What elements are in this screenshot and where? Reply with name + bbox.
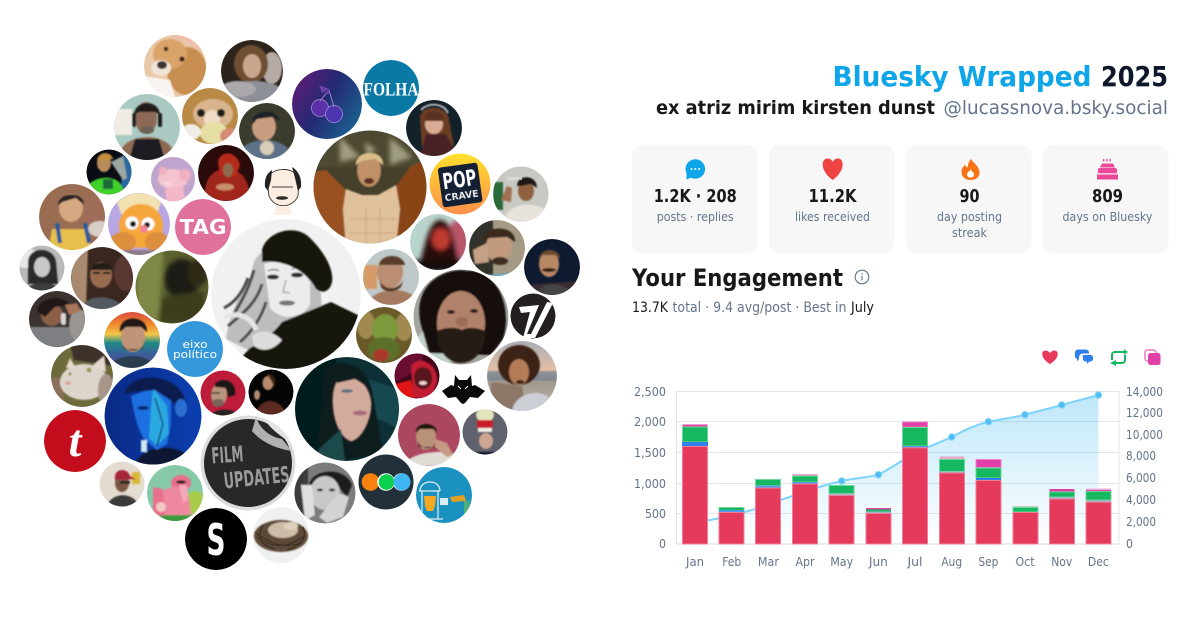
month labels: Sep (978, 555, 998, 569)
avatar: orange cartoon character (108, 193, 170, 258)
avatar: girl with brown hair (221, 40, 283, 102)
bar: Nov (1050, 489, 1074, 544)
line data points (838, 392, 1102, 484)
avatar: TAG logo: TAG (180, 215, 226, 239)
avatar: red robed man painting (198, 145, 254, 201)
avatar: black and white woman (20, 246, 64, 290)
bar: May (829, 486, 854, 544)
stacked bars (682, 422, 1111, 544)
stat value: 1.2K · 208 (654, 186, 737, 207)
avatar: man on rose background (398, 404, 460, 466)
avatar: bird nest (253, 507, 309, 563)
avatar: meerkat plush (181, 88, 240, 144)
avatar: tumblr-style t logo: t (69, 415, 83, 466)
month labels: Nov (1051, 555, 1072, 569)
subtitle: display name and handle (656, 97, 1168, 119)
avatar: Film Updates sticker logo: FILM (211, 442, 244, 470)
avatar: Pop Crave logo (430, 154, 490, 214)
avatar: white cat (51, 345, 114, 407)
right axis labels: 8,000 (1126, 449, 1156, 463)
stat label: posts · replies (657, 209, 734, 224)
panel: stat days on Bluesky (1043, 145, 1168, 253)
avatar: man in red cap (100, 462, 144, 508)
avatar: blurry red face (410, 214, 470, 272)
avatar: man in blue light (104, 368, 202, 468)
bar: Jul (902, 422, 928, 544)
avatar: man in red light (394, 354, 440, 398)
cumulative area (695, 395, 1098, 544)
bar: Feb (719, 508, 744, 544)
avatar: FOLHA logo: FOLHA (364, 80, 419, 100)
icon: repost arrows (1110, 349, 1128, 366)
left axis labels: 1,500 (634, 446, 666, 460)
avatar: man on phone (29, 291, 89, 347)
month labels: Jun (868, 555, 888, 569)
cumulative line (695, 395, 1098, 523)
avatar: large black and white portrait with hat (211, 219, 364, 374)
month labels: May (830, 555, 853, 569)
month labels: Apr (796, 555, 815, 569)
bar: Aug (940, 456, 964, 544)
avatar: big curly haired man (414, 270, 508, 367)
heading: Your Engagement: Your Engagement (631, 264, 843, 292)
panel: stat posts and replies (632, 145, 758, 253)
avatar: man with headphones (114, 94, 180, 160)
left axis labels: 2,000 (634, 415, 666, 429)
right axis labels (1126, 385, 1163, 551)
avatar: man in green suit (86, 150, 132, 196)
avatar: tumblr-style t logo (44, 410, 106, 472)
bar: Mar (756, 480, 780, 544)
avatar: pink tongue pokemon (147, 465, 205, 523)
icon: speech bubble (686, 159, 705, 180)
avatar: sketch of bald man (264, 167, 302, 215)
icon: info (855, 270, 869, 284)
left axis labels (634, 385, 666, 551)
month labels: Jul (906, 555, 922, 569)
icon: replies chat bubbles (1075, 350, 1093, 364)
bar: Sep (976, 460, 1001, 544)
stat value: 90 (960, 186, 980, 207)
avatar: woman with long dark hair in teal light (295, 357, 399, 461)
month labels: Feb (722, 555, 741, 569)
chart: monthly engagement stacked bars with cumulative line (634, 385, 1163, 569)
avatar: S logo (185, 508, 247, 570)
avatar: man on rainbow background (104, 312, 160, 368)
right axis labels: 14,000 (1126, 385, 1163, 399)
avatar: man with raised hand: cremla (507, 176, 523, 182)
month labels: Dec (1088, 555, 1109, 569)
avatar: S logo: S (206, 515, 226, 566)
left axis labels: 0 (659, 537, 666, 551)
right axis labels: 6,000 (1126, 471, 1156, 485)
avatar: golden dog (144, 35, 207, 97)
stat value: 809 (1092, 186, 1123, 207)
icon: birthday cake (1097, 159, 1118, 180)
avatar: girl with bangs (406, 100, 462, 156)
icon: flame (962, 159, 980, 180)
engagement summary: total · 9.4 avg/post · Best in (672, 300, 846, 316)
left axis labels: 500 (645, 507, 666, 521)
right axis labels: 12,000 (1126, 406, 1163, 420)
stat label: days on Bluesky (1062, 209, 1153, 224)
avatar: Eixo Politico logo (167, 321, 223, 377)
avatar: young person in denim (239, 103, 295, 159)
subtitle: display name and handle: @lucassnova.bsky.social (944, 97, 1168, 119)
bar: Apr (792, 474, 818, 544)
avatar: black wolf crest (442, 375, 485, 404)
month labels: Mar (758, 555, 779, 569)
right axis labels: 0 (1126, 537, 1133, 551)
title: 2025 (1101, 60, 1168, 93)
icon: heart likes (1042, 350, 1058, 364)
stat label (937, 209, 1002, 240)
avatar: Film Updates sticker logo (200, 415, 298, 510)
month labels: Jan (685, 555, 704, 569)
left axis labels: 2,500 (634, 385, 666, 399)
title: Bluesky Wrapped (832, 60, 1092, 93)
grid lines (676, 391, 1119, 544)
avatar: three dots logo (358, 454, 414, 510)
avatar: Eixo Politico logo: eixo (183, 339, 207, 351)
avatar: woman on black background (248, 370, 294, 416)
subtitle: display name and handle: ex atriz mirim kirsten dunst (656, 97, 935, 119)
left axis labels: 1,000 (634, 477, 666, 491)
avatar: curly man resting on hand (469, 220, 525, 276)
avatar: Pop Crave logo: CRAVE (444, 189, 479, 204)
avatar: Film Updates sticker logo: UPDATES (223, 463, 291, 495)
engagement summary: 13.7K (632, 300, 669, 316)
month labels: Oct (1016, 555, 1035, 569)
avatar: dark olive figure (136, 250, 208, 324)
avatar: FOLHA logo (363, 60, 419, 116)
avatar: black and white man with hands on face (294, 462, 356, 524)
stat label: likes received (795, 209, 870, 224)
month labels: Aug (941, 555, 962, 569)
panel: stat posting streak (906, 145, 1032, 253)
avatar: man with glasses (71, 247, 138, 310)
avatar: toddler in striped tank top (39, 184, 105, 250)
avatar: Grinch toy (356, 307, 413, 363)
right axis labels: 10,000 (1126, 428, 1163, 442)
avatar: old man with tall red hat (462, 408, 508, 456)
right axis labels: 4,000 (1126, 493, 1156, 507)
avatar: shirtless man with raised arms (310, 130, 430, 247)
bar: Jun (866, 508, 891, 544)
icon: heart (823, 158, 843, 180)
avatar: man with moustache at night (524, 239, 580, 295)
icon: quotes copies (1145, 350, 1160, 365)
bar: Oct (1013, 506, 1038, 544)
avatar: man with glasses on red (200, 370, 246, 417)
panel: avatar bubble cluster (14, 35, 580, 570)
avatar: V logo (510, 294, 556, 338)
avatar: Pop Crave logo: POP (441, 166, 478, 195)
avatar: pink rat cartoon (151, 157, 195, 203)
stat label: day posting (937, 209, 1002, 224)
right axis labels: 2,000 (1126, 515, 1156, 529)
panel: stat likes received (769, 145, 894, 253)
engagement summary: July (850, 300, 874, 316)
legend icons (1042, 349, 1160, 366)
avatar: TAG logo (175, 199, 231, 255)
avatar: man with raised hand (493, 166, 548, 222)
stat label: streak (952, 225, 988, 240)
bar: Jan (682, 424, 708, 544)
avatar: curly hair man at sunset (487, 341, 557, 416)
bar: Dec (1086, 488, 1111, 544)
avatar: Eixo Politico logo: político (173, 348, 217, 361)
month labels (685, 555, 1109, 569)
avatar: bulb and birdcage illustration (416, 467, 472, 523)
avatar: bearded man (363, 249, 419, 305)
stat value: 11.2K (808, 186, 857, 207)
avatar: cherry emblem (292, 69, 362, 139)
